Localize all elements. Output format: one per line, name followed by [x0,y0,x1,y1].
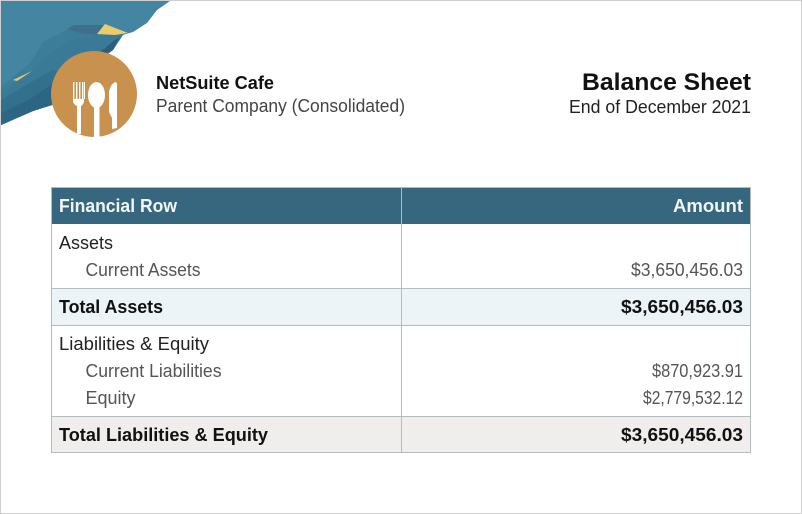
assets rows [59,233,743,280]
liabilities and equity rows: Liabilities & Equity [59,334,209,354]
icon: knife [109,82,117,129]
total assets row [52,288,750,325]
liabilities and equity rows: $870,923.91 [652,361,743,381]
liabilities and equity rows: $2,779,532.12 [643,388,743,408]
logo: orange circle with cutlery [51,51,137,137]
table header row [52,188,750,224]
liabilities and equity rows: Equity [86,388,136,408]
assets rows: Assets [59,233,113,253]
assets rows: Current Assets [86,260,200,280]
icon: spoon [88,82,105,137]
assets rows: $3,650,456.03 [631,260,743,280]
company subtitle: Parent Company (Consolidated) [156,95,405,116]
balance sheet table [52,188,750,452]
total assets row: Total Assets [59,297,163,317]
total liabilities and equity row: Total Liabilities & Equity [59,425,268,445]
total assets row: $3,650,456.03 [621,297,743,317]
total liabilities and equity row: $3,650,456.03 [621,425,743,445]
total liabilities and equity row [52,416,750,452]
company name: NetSuite Cafe [156,73,274,93]
icon: fork [73,82,85,134]
title: Balance Sheet [582,69,751,96]
decorative watercolor corner [1,1,170,125]
period subtitle: End of December 2021 [569,96,751,117]
liabilities and equity rows: Current Liabilities [86,361,222,381]
table header row: Amount [673,196,743,216]
liabilities and equity rows [59,334,743,408]
table header row: Financial Row [59,196,178,216]
